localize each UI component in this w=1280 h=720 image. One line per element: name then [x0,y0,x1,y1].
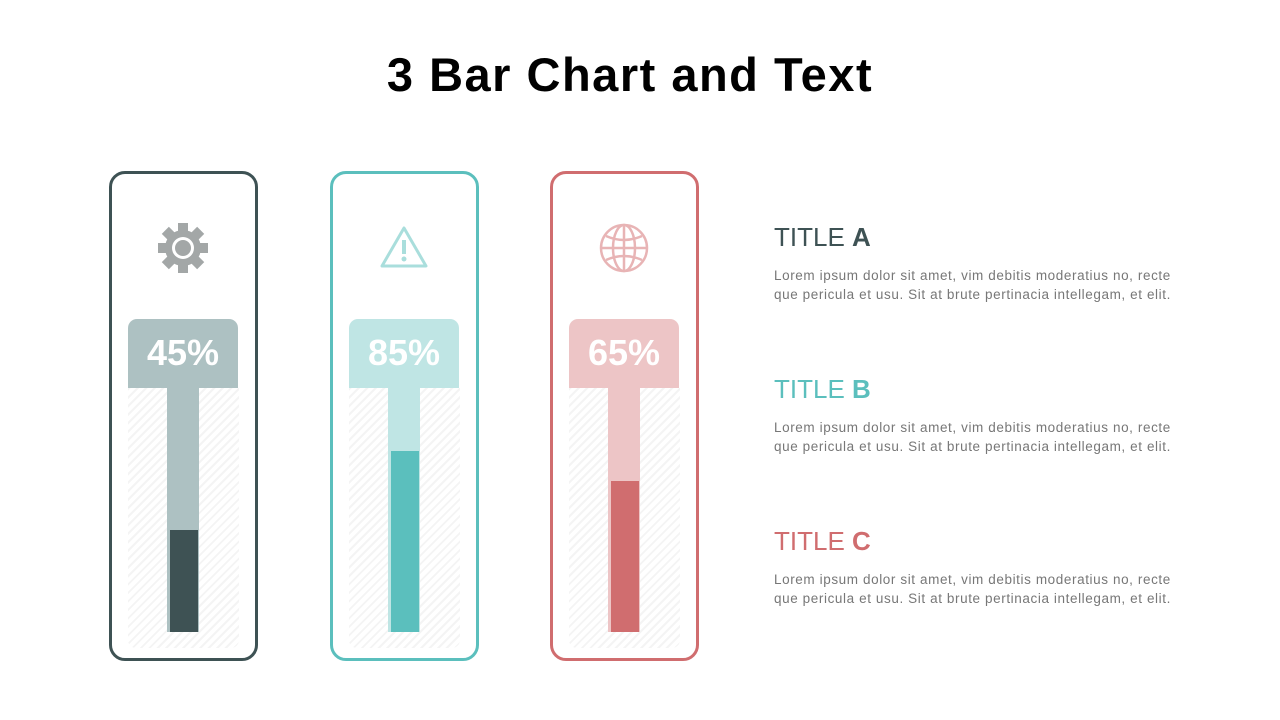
text B: Lorem ipsum dolor sit amet, vim debitis moderatius no, recte [774,420,1171,435]
text A: que pericula et usu. Sit at brute pertinacia intellegam, et elit. [774,287,1171,302]
title: 3 Bar Chart and Text [387,48,873,101]
label 45% [128,319,238,388]
text C [774,572,1171,606]
label 65%: 65% [588,332,660,373]
heading: title C: TITLE C [774,526,871,556]
icon: gear [158,223,208,273]
icon: warning [380,226,428,268]
label 45%: 45% [147,332,219,373]
text A: Lorem ipsum dolor sit amet, vim debitis moderatius no, recte [774,268,1171,283]
heading: title A: TITLE A [774,222,871,252]
heading: title B: TITLE B [774,374,871,404]
label 85%: 85% [368,332,440,373]
text C: Lorem ipsum dolor sit amet, vim debitis moderatius no, recte [774,572,1171,587]
text B [774,420,1171,454]
label 65% [569,319,679,388]
bar fill A [170,530,198,632]
icon: globe [600,224,648,272]
text A [774,268,1171,302]
text C: que pericula et usu. Sit at brute pertinacia intellegam, et elit. [774,591,1171,606]
text B: que pericula et usu. Sit at brute pertinacia intellegam, et elit. [774,439,1171,454]
bar fill C [611,481,639,632]
panel: bar A [109,171,258,661]
bar fill B [391,451,419,632]
panel: bar C [550,171,699,661]
panel: bar B [330,171,479,661]
label 85% [349,319,459,388]
